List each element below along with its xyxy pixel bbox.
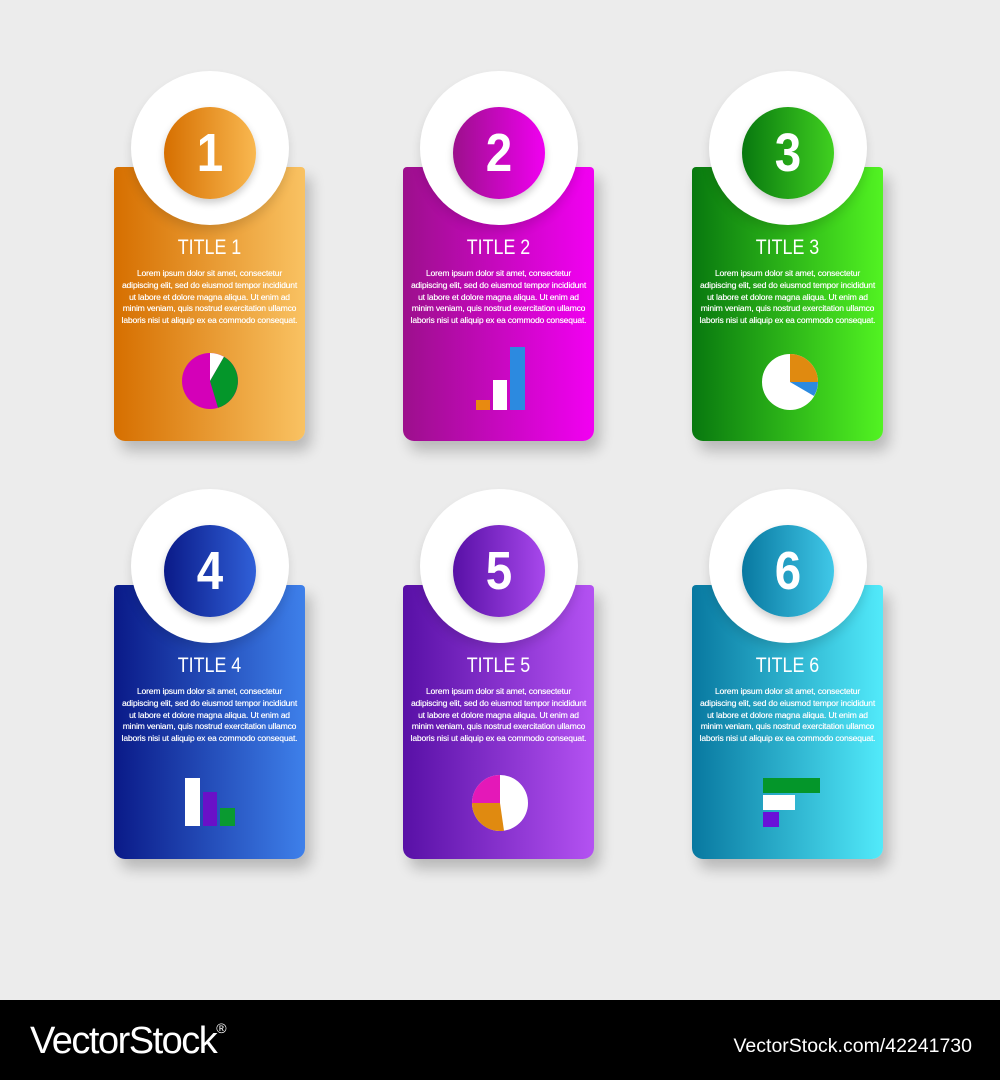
number 5 [453,525,545,617]
text 4: minim veniam, quis nostrud exercitation ullamco [123,721,296,731]
text 2: laboris nisi ut aliquip ex ea commodo consequat. [411,315,586,325]
footer brand: VectorStock® [30,1020,225,1062]
icon: pie chart 1 [182,353,238,409]
text 2: ut labore et dolore magna aliqua. Ut enim ad [418,292,579,302]
text 6 [700,686,876,743]
text 5: ut labore et dolore magna aliqua. Ut enim ad [418,710,579,720]
number 5: 5 [486,541,512,601]
text 6: Lorem ipsum dolor sit amet, consectetur [715,686,860,696]
number 4: 4 [197,541,223,601]
text 4: laboris nisi ut aliquip ex ea commodo consequat. [122,733,297,743]
title 4: TITLE 4 [178,654,241,677]
text 3: minim veniam, quis nostrud exercitation ullamco [701,303,874,313]
card 3 [692,167,883,441]
text 5: Lorem ipsum dolor sit amet, consectetur [426,686,571,696]
title 6: TITLE 6 [756,654,819,677]
icon: pie chart 5 [472,775,528,831]
text 4: ut labore et dolore magna aliqua. Ut enim ad [129,710,290,720]
card 1 [114,167,305,441]
text 6: laboris nisi ut aliquip ex ea commodo consequat. [700,733,875,743]
ring 3 [709,71,867,225]
text 1: minim veniam, quis nostrud exercitation ullamco [123,303,296,313]
card 5 [403,585,594,859]
text 6: adipiscing elit, sed do eiusmod tempor incididunt [700,698,875,708]
footer [0,1000,1000,1080]
text 3 [700,268,876,325]
icon: bar chart 2 [476,347,525,410]
footer url: VectorStock.com/42241730 [734,1035,972,1057]
number 1: 1 [197,123,223,183]
icon: horizontal bar chart 6 [763,778,820,827]
text 1: laboris nisi ut aliquip ex ea commodo consequat. [122,315,297,325]
text 3: ut labore et dolore magna aliqua. Ut enim ad [707,292,868,302]
text 2: Lorem ipsum dolor sit amet, consectetur [426,268,571,278]
ring 2 [420,71,578,225]
number 3: 3 [775,123,801,183]
text 5: laboris nisi ut aliquip ex ea commodo consequat. [411,733,586,743]
card 2 [403,167,594,441]
number 3 [742,107,834,199]
card 6 [692,585,883,859]
ring 1 [131,71,289,225]
ring 5 [420,489,578,643]
number 2: 2 [486,123,512,183]
title 1: TITLE 1 [178,236,241,259]
number 2 [453,107,545,199]
text 2 [410,268,586,325]
ring 4 [131,489,289,643]
text 5 [410,686,586,743]
text 6: ut labore et dolore magna aliqua. Ut enim ad [707,710,868,720]
text 2: minim veniam, quis nostrud exercitation ullamco [412,303,585,313]
icon: bar chart 4 [185,778,235,826]
number 6: 6 [775,541,801,601]
card 4 [114,585,305,859]
number 1 [164,107,256,199]
number 6 [742,525,834,617]
ring 6 [709,489,867,643]
text 3: Lorem ipsum dolor sit amet, consectetur [715,268,860,278]
text 1: Lorem ipsum dolor sit amet, consectetur [137,268,282,278]
text 4 [122,686,298,743]
text 1 [122,268,298,325]
title 2: TITLE 2 [467,236,530,259]
text 6: minim veniam, quis nostrud exercitation ullamco [701,721,874,731]
icon: pie chart 3 [762,354,818,410]
text 4: Lorem ipsum dolor sit amet, consectetur [137,686,282,696]
text 5: adipiscing elit, sed do eiusmod tempor incididunt [411,698,586,708]
text 3: laboris nisi ut aliquip ex ea commodo consequat. [700,315,875,325]
text 2: adipiscing elit, sed do eiusmod tempor incididunt [411,280,586,290]
number 4 [164,525,256,617]
text 1: ut labore et dolore magna aliqua. Ut enim ad [129,292,290,302]
text 3: adipiscing elit, sed do eiusmod tempor incididunt [700,280,875,290]
text 1: adipiscing elit, sed do eiusmod tempor incididunt [122,280,297,290]
title 3: TITLE 3 [756,236,819,259]
text 5: minim veniam, quis nostrud exercitation ullamco [412,721,585,731]
text 4: adipiscing elit, sed do eiusmod tempor incididunt [122,698,297,708]
title 5: TITLE 5 [467,654,530,677]
